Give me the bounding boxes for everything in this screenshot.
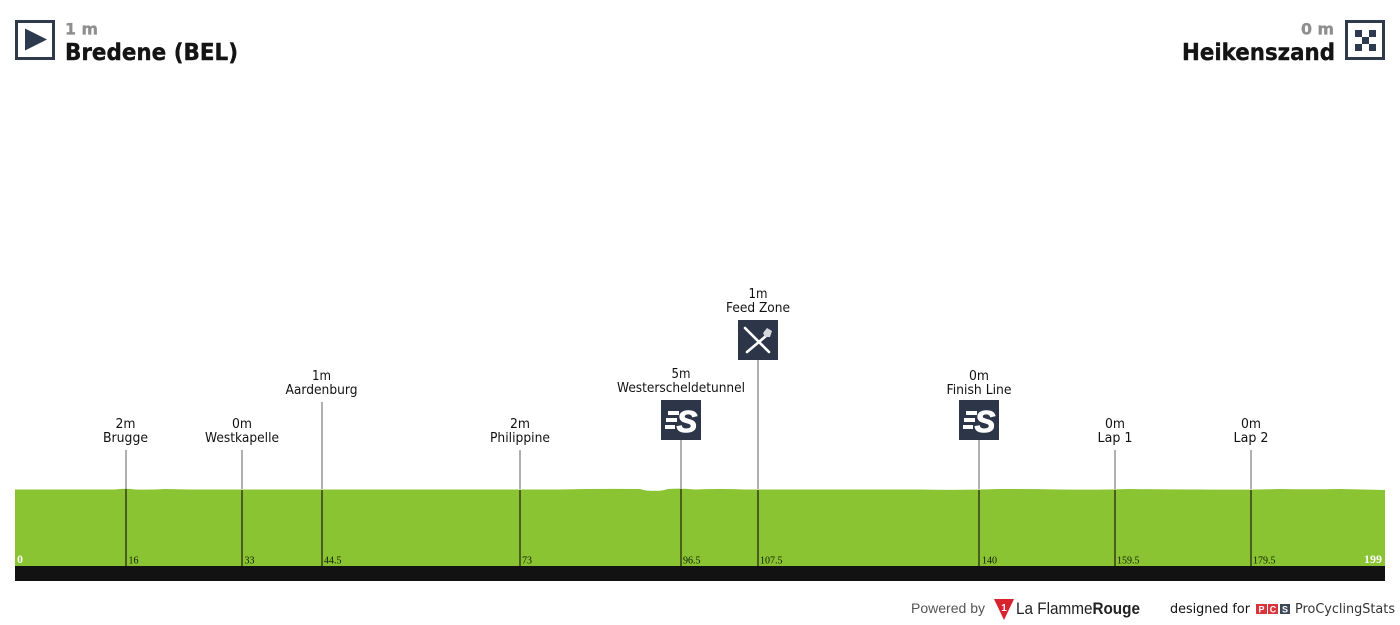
elevation profile: [15, 489, 1385, 566]
label: Feed Zone: Feed Zone: [726, 300, 790, 316]
label: Aardenburg: [286, 368, 358, 398]
finish altitude: 0 m: [1301, 20, 1334, 38]
marker lines: grey stems: [126, 360, 1251, 489]
label: Lap 1: [1098, 416, 1132, 446]
PCS logo boxes: P: [1258, 604, 1265, 614]
label: Brugge: 2m: [116, 416, 136, 432]
marker lines: dark stems in profile: [126, 489, 1251, 566]
ProCyclingStats text: ProCyclingStats: [1295, 602, 1395, 617]
distance labels: 73: [522, 556, 532, 566]
label: Lap 1: 0m: [1105, 416, 1125, 432]
label: Feed Zone: 1m: [748, 286, 768, 302]
label: Aardenburg: 1m: [312, 368, 331, 384]
icon: sprint Westerscheldetunnel: S: [677, 404, 698, 439]
icon: start play: [16, 22, 54, 58]
icon: red flamme rouge triangle: [994, 599, 1014, 620]
icon: sprint Finish Line: [959, 400, 999, 440]
label: Brugge: Brugge: [103, 430, 148, 446]
label: Philippine: [490, 416, 550, 446]
label: Finish Line: [946, 368, 1012, 398]
start altitude: 1 m: [65, 20, 98, 38]
distance labels: 33: [244, 556, 254, 566]
start header: Bredene: [16, 20, 238, 66]
designed for text: designed for: [1170, 602, 1251, 617]
PCS logo boxes: C: [1270, 604, 1277, 614]
label: Lap 2: 0m: [1241, 416, 1261, 432]
distance labels: [17, 552, 1382, 566]
distance labels: 107.5: [760, 556, 782, 566]
label: Westerscheldetunnel: Westerscheldetunnel: [617, 380, 745, 396]
La Flamme Rouge wordmark: La FlammeRouge: [1016, 599, 1140, 618]
PCS logo boxes: [1256, 604, 1290, 614]
PCS logo boxes: S: [1282, 604, 1288, 614]
baseline black bar: [15, 566, 1385, 581]
label: Philippine: Philippine: [490, 430, 550, 446]
distance labels: 44.5: [324, 556, 342, 566]
icon: finish chequered flag: [1346, 22, 1384, 58]
label: Lap 1: Lap 1: [1098, 430, 1132, 446]
distance labels: 159.5: [1117, 556, 1140, 566]
icon: feed zone crossed knife and fork: [738, 320, 778, 360]
footer: designed for ProCyclingStats: [1170, 602, 1395, 617]
label: Brugge: [103, 416, 148, 446]
distance labels: 0: [17, 552, 23, 566]
label: Westkapelle: Westkapelle: [205, 430, 279, 446]
label: Westkapelle: [205, 416, 279, 446]
label: Aardenburg: Aardenburg: [286, 382, 358, 398]
distance labels: 199: [1364, 552, 1382, 566]
finish header: Heikenszand: [1182, 20, 1384, 66]
icon: sprint Finish Line: S: [975, 404, 996, 439]
label: Finish Line: 0m: [969, 368, 989, 384]
label: Philippine: 2m: [510, 416, 530, 432]
distance labels: 179.5: [1253, 556, 1276, 566]
icon: red flamme rouge triangle: 1: [1001, 603, 1007, 614]
distance labels: 16: [128, 556, 138, 566]
icon: sprint Westerscheldetunnel: [661, 400, 701, 440]
label: Westerscheldetunnel: [617, 366, 745, 396]
label: Feed Zone: [726, 286, 790, 316]
distance labels: 96.5: [683, 556, 700, 566]
powered by text: Powered by: [911, 600, 985, 616]
distance labels: 140: [982, 556, 997, 566]
label: Westerscheldetunnel: 5m: [672, 366, 690, 382]
footer: Powered by La Flamme Rouge: [911, 599, 1140, 620]
start name: Bredene (BEL): [65, 38, 238, 66]
label: Lap 2: [1234, 416, 1268, 446]
label: Finish Line: Finish Line: [946, 382, 1012, 398]
finish name: Heikenszand: [1182, 38, 1335, 66]
label: Lap 2: Lap 2: [1234, 430, 1268, 446]
label: Westkapelle: 0m: [232, 416, 252, 432]
